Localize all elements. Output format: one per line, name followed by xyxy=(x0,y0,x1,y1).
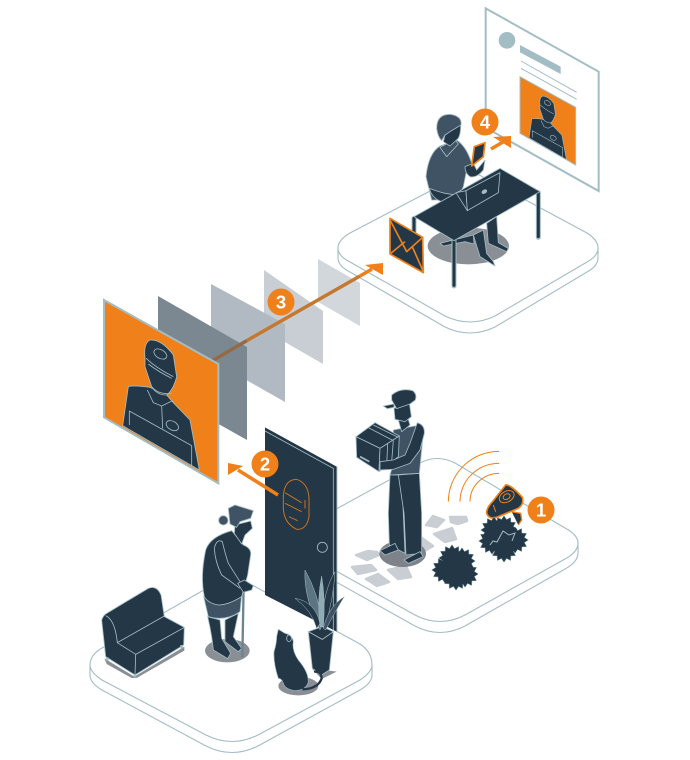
reader hook xyxy=(512,512,522,525)
arm line xyxy=(214,541,240,588)
legs and shoes xyxy=(208,617,231,659)
torso xyxy=(202,531,251,605)
number badge 4 xyxy=(472,108,498,136)
hand xyxy=(238,580,253,592)
cat tail xyxy=(303,672,322,689)
platform: right porch xyxy=(320,458,578,632)
platform: upper office xyxy=(338,170,598,333)
desk legs xyxy=(414,193,538,286)
vest xyxy=(390,425,423,475)
seated person at desk with phone and laptop xyxy=(414,114,540,286)
arm with phone xyxy=(465,160,485,177)
headline bar xyxy=(520,45,561,74)
face xyxy=(443,124,461,146)
arrow 3: photo to envelope xyxy=(212,263,383,361)
text lines xyxy=(521,61,577,99)
couch xyxy=(102,587,184,678)
number badge 3 xyxy=(268,288,294,316)
couch shadow xyxy=(104,647,184,678)
courier portrait xyxy=(123,340,199,470)
door edge xyxy=(265,431,337,632)
phone xyxy=(472,143,485,166)
gray frame 4 xyxy=(318,259,360,326)
shadow xyxy=(379,540,426,567)
desk top xyxy=(414,168,540,241)
hair xyxy=(437,114,461,141)
number badge 1 xyxy=(528,496,554,524)
signal arcs xyxy=(448,451,499,502)
photo of courier xyxy=(520,77,576,165)
neck and collar xyxy=(398,419,410,432)
pot rim xyxy=(308,627,333,639)
gray frame 2 xyxy=(211,284,285,402)
collar xyxy=(440,139,458,157)
laptop xyxy=(456,173,500,211)
arrow 2: lock to photo xyxy=(228,463,278,495)
cat shadow xyxy=(278,677,318,695)
couch body xyxy=(102,587,184,675)
floor shadow xyxy=(428,228,509,264)
couch feet xyxy=(107,645,182,677)
avatar circle xyxy=(499,32,515,49)
reader body xyxy=(487,485,523,518)
courier with parcel xyxy=(356,390,426,567)
gray frame 1 xyxy=(158,296,247,440)
face xyxy=(394,403,411,422)
legs xyxy=(388,475,405,553)
pot xyxy=(308,632,333,675)
platform: left living room xyxy=(90,574,372,752)
cat eye xyxy=(287,635,291,642)
hair xyxy=(219,505,253,527)
stepping stones xyxy=(352,516,467,586)
number badge 4: 4 xyxy=(480,112,491,132)
reader rings xyxy=(493,488,516,512)
large photo of courier xyxy=(104,300,218,483)
door with smart lock xyxy=(265,427,337,632)
arrow: phone to document xyxy=(491,136,511,149)
face xyxy=(234,521,252,544)
bush back xyxy=(479,516,528,562)
skirt xyxy=(204,595,242,618)
shadow xyxy=(205,639,250,662)
cane xyxy=(242,567,244,657)
potted plant xyxy=(295,570,344,679)
number badge 2 xyxy=(252,450,278,478)
bush front xyxy=(432,545,478,590)
cat body xyxy=(274,629,308,691)
envelope icon xyxy=(390,218,423,273)
elderly woman with cane xyxy=(202,505,253,662)
cap xyxy=(383,390,416,409)
shirt xyxy=(426,140,472,200)
arm xyxy=(380,423,424,470)
card reader with signal arcs xyxy=(448,451,523,525)
document panel with posted photo xyxy=(486,8,599,191)
smart lock xyxy=(283,479,309,529)
couch seams xyxy=(106,616,184,675)
arm on laptop xyxy=(429,188,467,208)
legs xyxy=(440,217,508,266)
gray frame 3 xyxy=(264,270,323,364)
leaves xyxy=(295,570,344,630)
parcel xyxy=(356,423,399,472)
door handle xyxy=(317,542,327,552)
number badge 2: 2 xyxy=(260,454,270,474)
number badge 1: 1 xyxy=(536,500,546,520)
shoes xyxy=(380,543,398,555)
plant shadow xyxy=(312,668,337,679)
cat xyxy=(274,629,322,695)
number badge 3: 3 xyxy=(276,292,286,312)
